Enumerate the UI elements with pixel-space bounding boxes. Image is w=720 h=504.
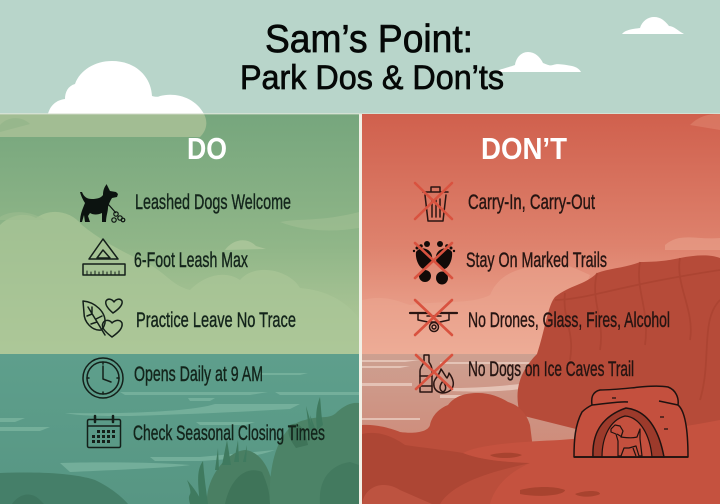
- icon: crossed drone: [410, 300, 457, 335]
- text: Stay On Marked Trails: [466, 249, 607, 272]
- icon: calendar: [88, 416, 120, 448]
- icon: dog: [80, 184, 125, 222]
- rocks and grass left: [0, 397, 359, 504]
- icon: ruler and triangle: [83, 239, 125, 275]
- cloud scenery left: [0, 114, 359, 354]
- small cloud top right: [622, 17, 684, 34]
- item: carry in: [415, 183, 595, 221]
- item: marked trails: [413, 241, 607, 284]
- sky background: [0, 0, 720, 114]
- icon: leaf and hearts: [83, 299, 122, 337]
- panel: do: [0, 114, 359, 504]
- icon: crossed footprints: [413, 241, 455, 284]
- large white cloud: [48, 61, 204, 114]
- water right: [362, 354, 720, 504]
- text: Leashed Dogs Welcome: [135, 191, 291, 214]
- divider: [359, 114, 362, 504]
- item: leashed dogs: [80, 184, 291, 222]
- text: Opens Daily at 9 AM: [134, 363, 263, 386]
- title: Sam’s Point:: [265, 18, 473, 61]
- ground and rock formations: [362, 255, 720, 504]
- text: Check Seasonal Closing Times: [133, 422, 325, 445]
- title: Park Dos & Don’ts: [240, 59, 504, 97]
- icon: crossed bottle and flame: [416, 355, 453, 393]
- text: Practice Leave No Trace: [136, 309, 296, 332]
- text: 6-Foot Leash Max: [134, 249, 248, 272]
- text: Carry-In, Carry-Out: [468, 191, 595, 214]
- icon: clock: [83, 358, 123, 398]
- heading: don't: DON’T: [481, 131, 567, 166]
- small cloud behind title: [494, 52, 581, 72]
- item: ice caves: [416, 355, 634, 393]
- icon: cave with dog: [574, 386, 688, 457]
- cloud scenery right: [362, 114, 720, 354]
- icon: crossed trash can: [415, 183, 452, 221]
- heading: do: DO: [187, 131, 227, 166]
- water left: [0, 354, 359, 504]
- item: seasonal closing: [88, 416, 325, 448]
- cave dog: [611, 425, 642, 456]
- title: [240, 18, 504, 97]
- text: No Dogs on Ice Caves Trail: [468, 358, 634, 381]
- item: opening hours: [83, 358, 263, 398]
- item: leash length: [83, 239, 248, 275]
- item: leave no trace: [83, 299, 296, 337]
- item: no drones: [410, 300, 670, 335]
- panel: don't: [362, 114, 720, 504]
